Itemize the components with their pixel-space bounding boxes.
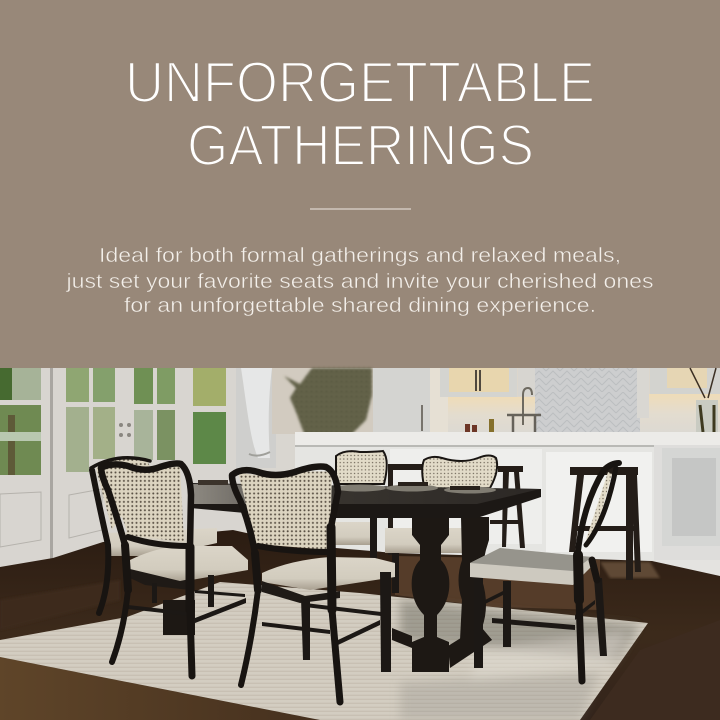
back chair: far left of centre bbox=[335, 451, 387, 560]
chair: back left bbox=[91, 458, 217, 613]
legs and stretchers bbox=[262, 572, 391, 672]
frame bbox=[101, 463, 191, 547]
hardwood floor bbox=[0, 530, 720, 720]
description text: Ideal for both formal gatherings and relaxed meals, bbox=[99, 244, 621, 267]
table top bbox=[190, 483, 541, 518]
rear legs and stretchers bbox=[128, 575, 246, 625]
description text bbox=[65, 244, 654, 317]
divider bbox=[310, 208, 411, 210]
title: GATHERINGS bbox=[187, 114, 534, 178]
seat bbox=[262, 557, 395, 590]
frame bbox=[232, 467, 338, 553]
place settings bbox=[198, 480, 496, 494]
rug bbox=[0, 582, 648, 720]
cane back bbox=[586, 472, 612, 540]
back wall bbox=[0, 368, 720, 568]
curtain bbox=[236, 368, 276, 468]
chair: front centre bbox=[232, 467, 395, 702]
chair: front left bbox=[101, 463, 248, 676]
cane back bbox=[106, 466, 184, 542]
frame bbox=[577, 463, 619, 560]
cane back bbox=[238, 471, 332, 550]
plant and vase bbox=[272, 368, 375, 476]
kitchen island bbox=[295, 432, 720, 576]
stools bbox=[388, 464, 641, 580]
kitchen wall, cabinets and backsplash bbox=[373, 368, 720, 434]
description text: just set your favorite seats and invite your cherished ones bbox=[65, 270, 654, 293]
french doors and windows bbox=[0, 368, 240, 568]
legs and stretchers bbox=[474, 578, 607, 668]
title: UNFORGETTABLE bbox=[125, 51, 595, 115]
chair: right side view bbox=[470, 463, 619, 681]
pedestals and base bbox=[163, 517, 492, 672]
description text: for an unforgettable shared dining experience. bbox=[124, 294, 596, 317]
back chair: far centre bbox=[385, 456, 497, 593]
title bbox=[125, 51, 595, 178]
table bbox=[163, 480, 541, 672]
background panel bbox=[0, 0, 720, 368]
faucet and counter items bbox=[465, 368, 718, 433]
seat bbox=[130, 546, 248, 582]
photo: dining room scene bbox=[0, 368, 720, 720]
seat bbox=[470, 548, 592, 585]
